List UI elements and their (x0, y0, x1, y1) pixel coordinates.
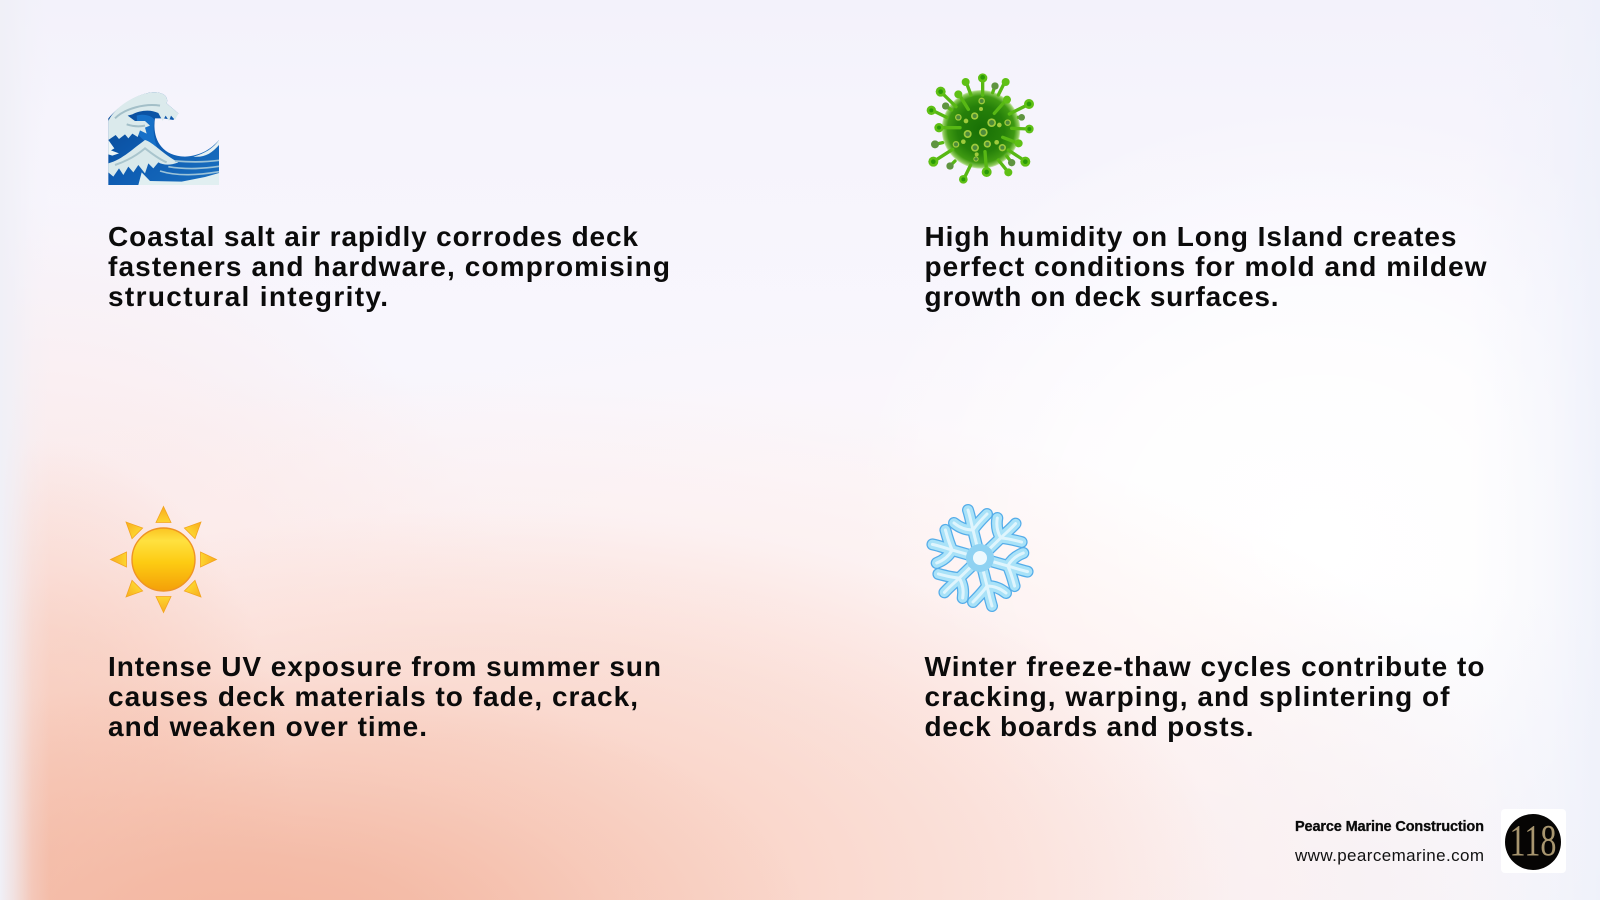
icon: snowflake (925, 510, 1035, 606)
logo: 118 badge (1501, 809, 1566, 873)
text: freeze-thaw (924, 651, 1484, 742)
text: website: www.pearcemarine.com (1294, 846, 1484, 865)
text: freeze-thaw: Winter freeze-thaw cycles contribute to (924, 651, 1484, 682)
footer: company credit (1294, 809, 1566, 873)
text: salt air (108, 221, 670, 312)
text: company name: Pearce Marine Construction (1295, 819, 1484, 835)
icon: green microbe (927, 73, 1034, 184)
text: freeze-thaw: deck boards and posts. (924, 711, 1254, 742)
panel: freeze-thaw (924, 510, 1484, 742)
text: UV: Intense UV exposure from summer sun (108, 651, 661, 682)
panel: humidity and mold (924, 73, 1487, 312)
text: humidity: perfect conditions for mold and mildew (924, 251, 1487, 282)
text: UV: and weaken over time. (108, 711, 427, 742)
text: UV (108, 651, 661, 742)
text: humidity (924, 221, 1487, 312)
text: freeze-thaw: cracking, warping, and splintering of (924, 681, 1450, 712)
text: salt air: fasteners and hardware, compromising (108, 251, 670, 282)
text: humidity: High humidity on Long Island creates (924, 221, 1456, 252)
icon: ocean wave (108, 92, 219, 185)
text: UV: causes deck materials to fade, crack, (108, 681, 638, 712)
logo: 118 badge: 118 (1510, 816, 1556, 865)
text: humidity: growth on deck surfaces. (924, 281, 1278, 312)
panel: UV exposure (108, 506, 661, 742)
text: salt air: structural integrity. (108, 281, 388, 312)
panel: salt air corrosion (108, 92, 670, 312)
icon: sun (110, 506, 216, 612)
text: salt air: Coastal salt air rapidly corrodes deck (108, 221, 638, 252)
